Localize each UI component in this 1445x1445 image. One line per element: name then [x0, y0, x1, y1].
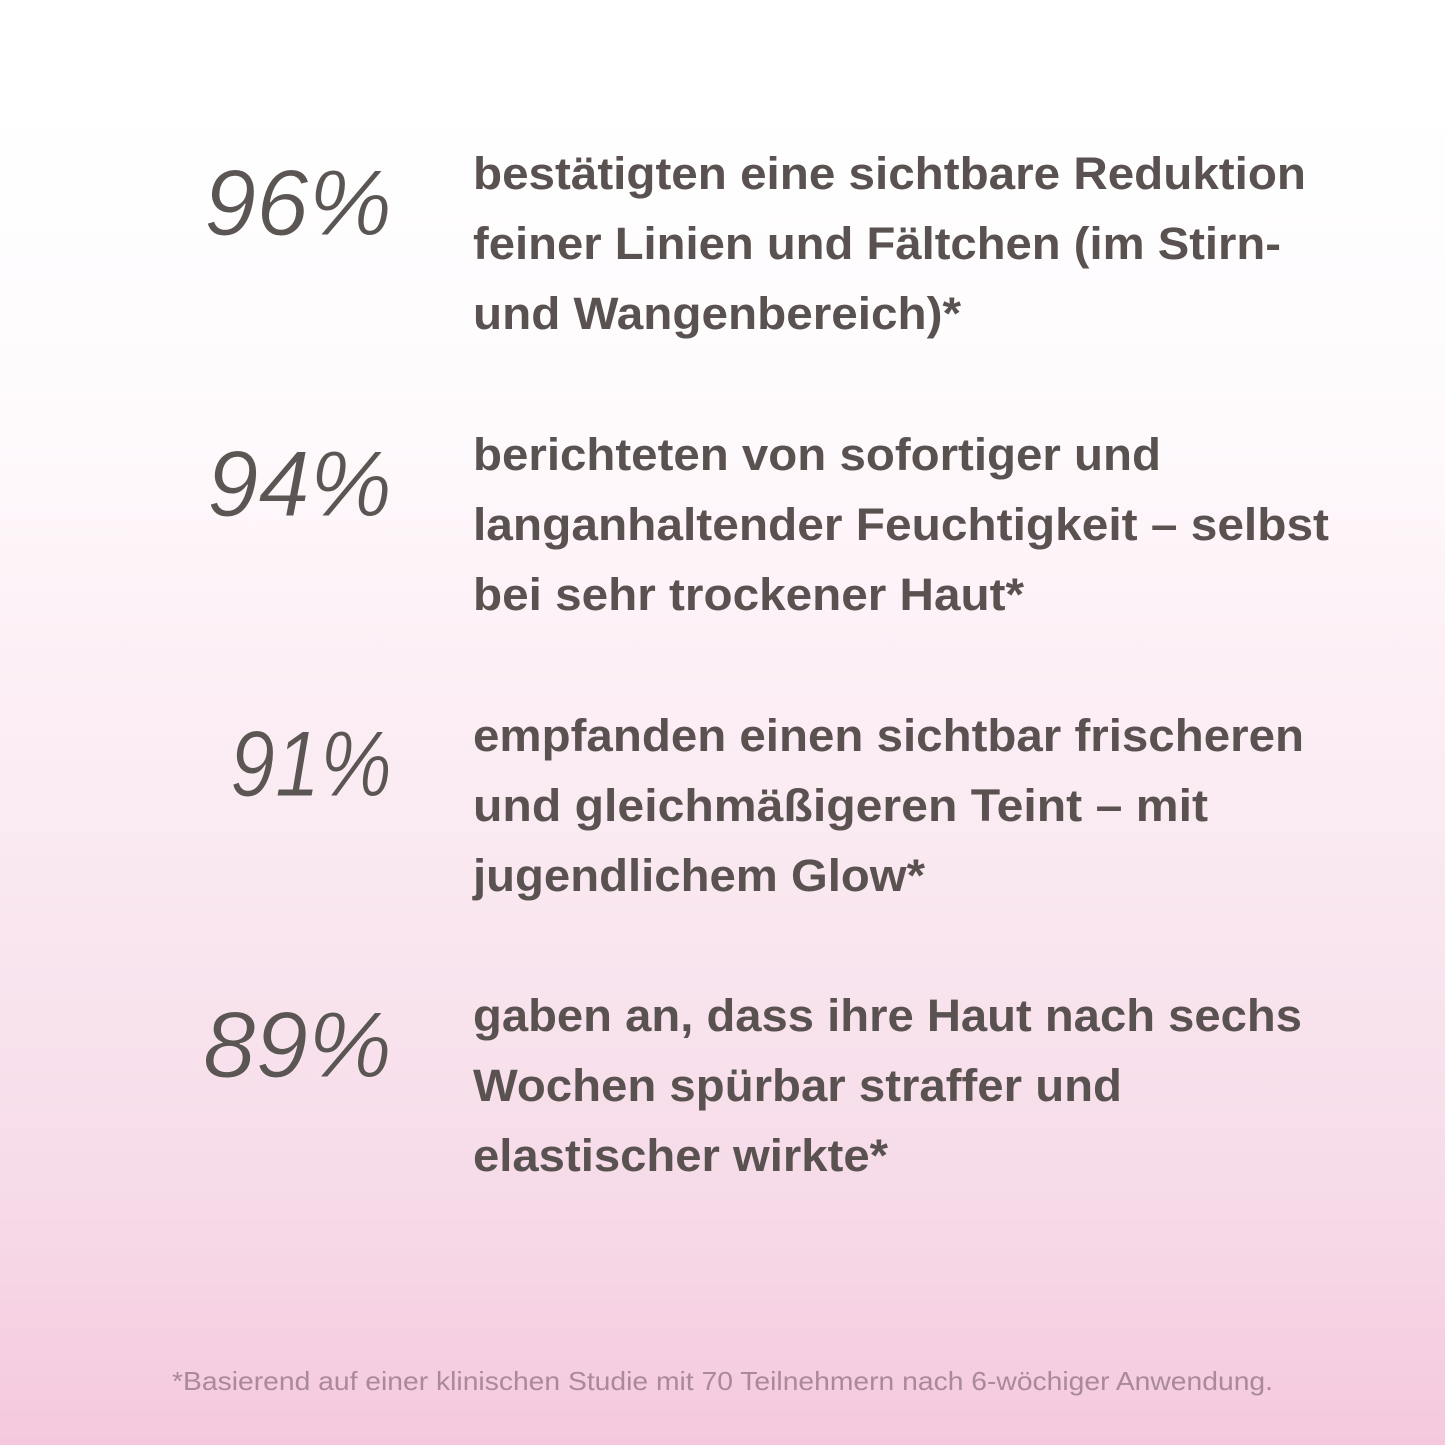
description 94%: bei sehr trockener Haut* — [473, 569, 1025, 620]
description 91%: jugendlichem Glow* — [472, 850, 925, 901]
stat 1: 96% — [204, 148, 1306, 339]
percentage 94%: 94% — [207, 431, 392, 536]
percentage 96%: 96% — [204, 150, 392, 255]
stat 3: 91% — [230, 710, 1304, 901]
description 96%: feiner Linien und Fältchen (im Stirn- — [473, 218, 1281, 269]
description 91% — [472, 710, 1304, 901]
description 89% — [473, 990, 1302, 1181]
description 91%: empfanden einen sichtbar frischeren — [473, 710, 1304, 761]
percentage 89%: 89% — [203, 992, 392, 1097]
description 91%: und gleichmäßigeren Teint – mit — [473, 780, 1208, 831]
description 94%: berichteten von sofortiger und — [473, 429, 1161, 480]
description 96%: bestätigten eine sichtbare Reduktion — [473, 148, 1306, 199]
footnote: *Basierend auf einer klinischen Studie mit 70 Teilnehmern nach 6-wöchiger Anwendung. — [172, 1366, 1273, 1396]
description 89%: elastischer wirkte* — [473, 1130, 888, 1181]
description 94% — [473, 429, 1329, 620]
description 96% — [473, 148, 1306, 339]
percentage 91%: 91% — [230, 711, 392, 816]
description 96%: und Wangenbereich)* — [473, 288, 962, 339]
stat 4: 89% — [203, 990, 1302, 1181]
description 94%: langanhaltender Feuchtigkeit – selbst — [473, 499, 1329, 550]
description 89%: Wochen spürbar straffer und — [473, 1060, 1122, 1111]
description 89%: gaben an, dass ihre Haut nach sechs — [473, 990, 1302, 1041]
stat 2: 94% — [207, 429, 1329, 620]
